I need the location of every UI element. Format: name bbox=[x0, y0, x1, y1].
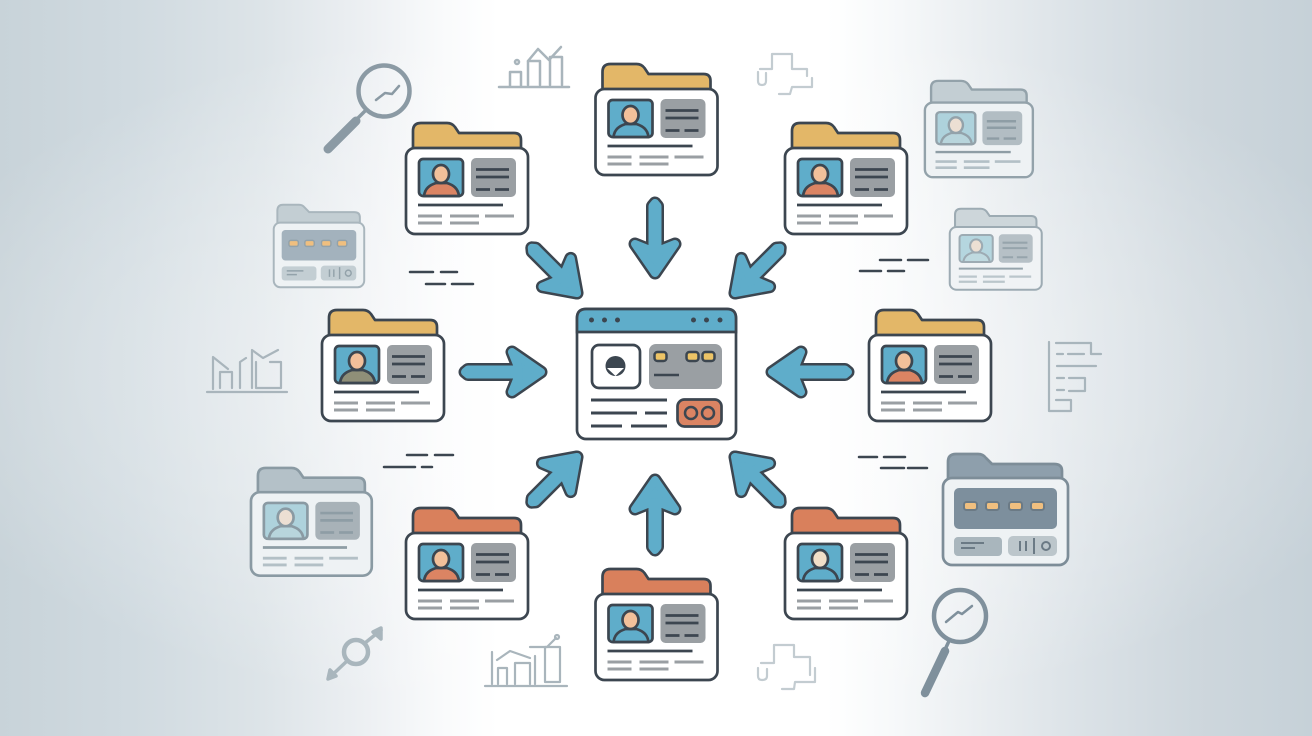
window frame bbox=[577, 309, 736, 439]
text lines bbox=[591, 400, 667, 426]
arrow: from lower left bbox=[518, 443, 591, 516]
decorative icon: line chart left bbox=[207, 350, 287, 392]
folder card: top bbox=[596, 64, 718, 175]
dash marks upper left bbox=[410, 272, 473, 284]
decorative panel: faded profile folder upper right bbox=[925, 81, 1033, 177]
decorative icon: circle with two arrows bbox=[328, 628, 381, 679]
decorative panel: faded profile folder lower left bbox=[251, 468, 372, 576]
decorative icon: puzzle outline top bbox=[758, 54, 812, 94]
folder card: right bbox=[869, 310, 991, 421]
folder card: bottom bbox=[596, 569, 718, 680]
arrow: from right bbox=[772, 352, 848, 392]
folder card: upper right bbox=[785, 123, 907, 234]
title bar dots bbox=[589, 318, 722, 322]
decorative icon: bar chart top bbox=[499, 47, 569, 87]
avatar icon box bbox=[592, 345, 640, 388]
folder card: left bbox=[322, 310, 444, 421]
folder card: lower right bbox=[785, 508, 907, 619]
decorative icon: magnifier lower right bbox=[925, 590, 986, 693]
decorative panel: faded dashboard folder left bbox=[274, 205, 364, 287]
arrow: from bottom bbox=[635, 480, 675, 550]
decorative icon: document outline right bbox=[1049, 342, 1101, 411]
central dashboard window bbox=[577, 309, 736, 439]
arrow: from lower right bbox=[721, 443, 794, 516]
arrow: from left bbox=[465, 352, 541, 392]
decorative panel: faded dashboard folder lower right bbox=[943, 454, 1068, 565]
orange toggle bbox=[678, 400, 722, 426]
folder card: lower left bbox=[406, 508, 528, 619]
dash marks upper right bbox=[860, 260, 928, 271]
arrow: from upper right bbox=[721, 234, 794, 307]
arrow: from upper left bbox=[518, 234, 591, 307]
window title bar bbox=[577, 309, 736, 332]
folder card: upper left bbox=[406, 123, 528, 234]
decorative panel: faded profile folder middle right bbox=[950, 209, 1042, 290]
decorative icon: magnifier top left bbox=[328, 66, 410, 149]
arrow: from top bbox=[635, 203, 675, 273]
decorative icon: puzzle outline bottom bbox=[758, 645, 815, 689]
dash marks lower left bbox=[384, 455, 453, 467]
dash marks lower right bbox=[859, 457, 927, 468]
decorative icon: bar chart bottom bbox=[485, 635, 567, 686]
grey status panel bbox=[649, 344, 722, 389]
